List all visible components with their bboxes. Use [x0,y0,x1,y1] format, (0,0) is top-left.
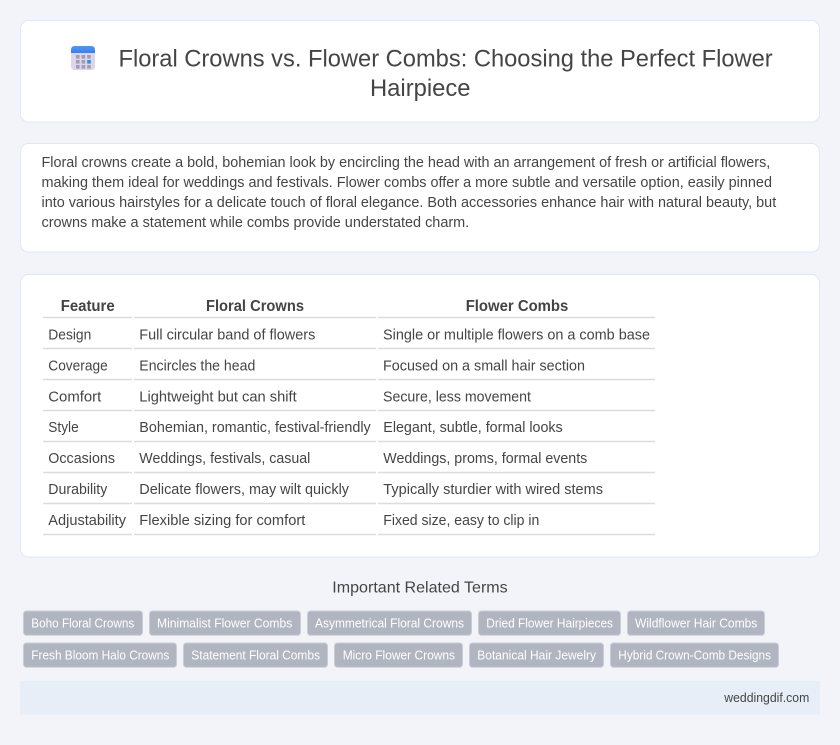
intro paragraph [42,155,776,231]
row: Durability: Durability [48,482,108,498]
row: Adjustability: Fixed size, easy to clip in [383,513,539,529]
title: Hairpiece [370,75,470,102]
heading: related terms: Important Related Terms [332,580,508,597]
row: Design [43,327,655,348]
row: Design: Full circular band of flowers [139,327,315,343]
tag list: related terms [24,611,778,667]
table header [43,298,655,318]
row: Occasions: Weddings, festivals, casual [139,451,310,467]
row: Adjustability: Adjustability [48,513,127,529]
panel: comparison table [20,274,820,557]
footer bar [20,681,820,715]
row: Occasions: Weddings, proms, formal events [383,451,587,467]
footer source: weddingdif.com [723,690,809,705]
row: Coverage: Coverage [48,358,108,374]
tag list: related terms: Boho Floral Crowns [31,615,134,630]
intro paragraph: Floral crowns create a bold, bohemian look by encircling the head with an arrangement of fresh or artificial flowers, [42,155,770,171]
table header: Floral Crowns [206,298,304,315]
row: Occasions [43,451,655,472]
row: Style [43,420,655,442]
row: Occasions: Occasions [48,451,115,467]
intro paragraph: crowns make a statement while combs provide understated charm. [42,215,469,231]
row: Adjustability [43,513,655,534]
title [118,46,773,102]
row: Durability: Delicate flowers, may wilt quickly [139,482,350,498]
tag list: related terms: Hybrid Crown-Comb Designs [618,647,771,662]
intro paragraph: making them ideal for weddings and festivals. Flower combs offer a more subtle and versatile option, easily pinned [42,175,772,191]
table header: Flower Combs [466,298,568,315]
row: Durability: Typically sturdier with wired stems [383,482,603,498]
intro paragraph: into various hairstyles for a delicate touch of floral elegance. Both accessories enhance hair with natural beauty, but [42,195,776,211]
row: Design: Design [48,327,91,343]
row: Style: Bohemian, romantic, festival-friendly [139,420,371,436]
row: Style: Elegant, subtle, formal looks [383,420,563,436]
row: Durability [43,482,655,504]
row: Coverage: Encircles the head [139,358,255,374]
row: Comfort [43,389,655,410]
row: Design: Single or multiple flowers on a comb base [383,327,650,343]
table header: Feature [61,298,115,315]
row: Comfort: Comfort [48,389,101,405]
tag list: related terms: Minimalist Flower Combs [157,615,292,630]
row: Coverage: Focused on a small hair section [383,358,585,374]
icon: calendar [71,46,95,70]
panel: introduction [20,144,820,252]
tag list: related terms: Dried Flower Hairpieces [486,615,613,630]
tag list: related terms: Asymmetrical Floral Crowns [315,615,464,630]
tag list: related terms: Statement Floral Combs [191,647,320,662]
row: Style: Style [48,420,79,436]
tag list: related terms: Micro Flower Crowns [343,647,455,662]
row: Comfort: Lightweight but can shift [139,389,297,405]
panel: title card [20,20,820,122]
row: Coverage [43,358,655,380]
title: Floral Crowns vs. Flower Combs: Choosing the Perfect Flower [118,46,773,73]
tag list: related terms: Botanical Hair Jewelry [477,647,597,662]
tag list: related terms: Wildflower Hair Combs [635,615,757,630]
tag list: related terms: Fresh Bloom Halo Crowns [31,647,169,662]
row: Adjustability: Flexible sizing for comfort [139,513,305,529]
row: Comfort: Secure, less movement [383,389,531,405]
